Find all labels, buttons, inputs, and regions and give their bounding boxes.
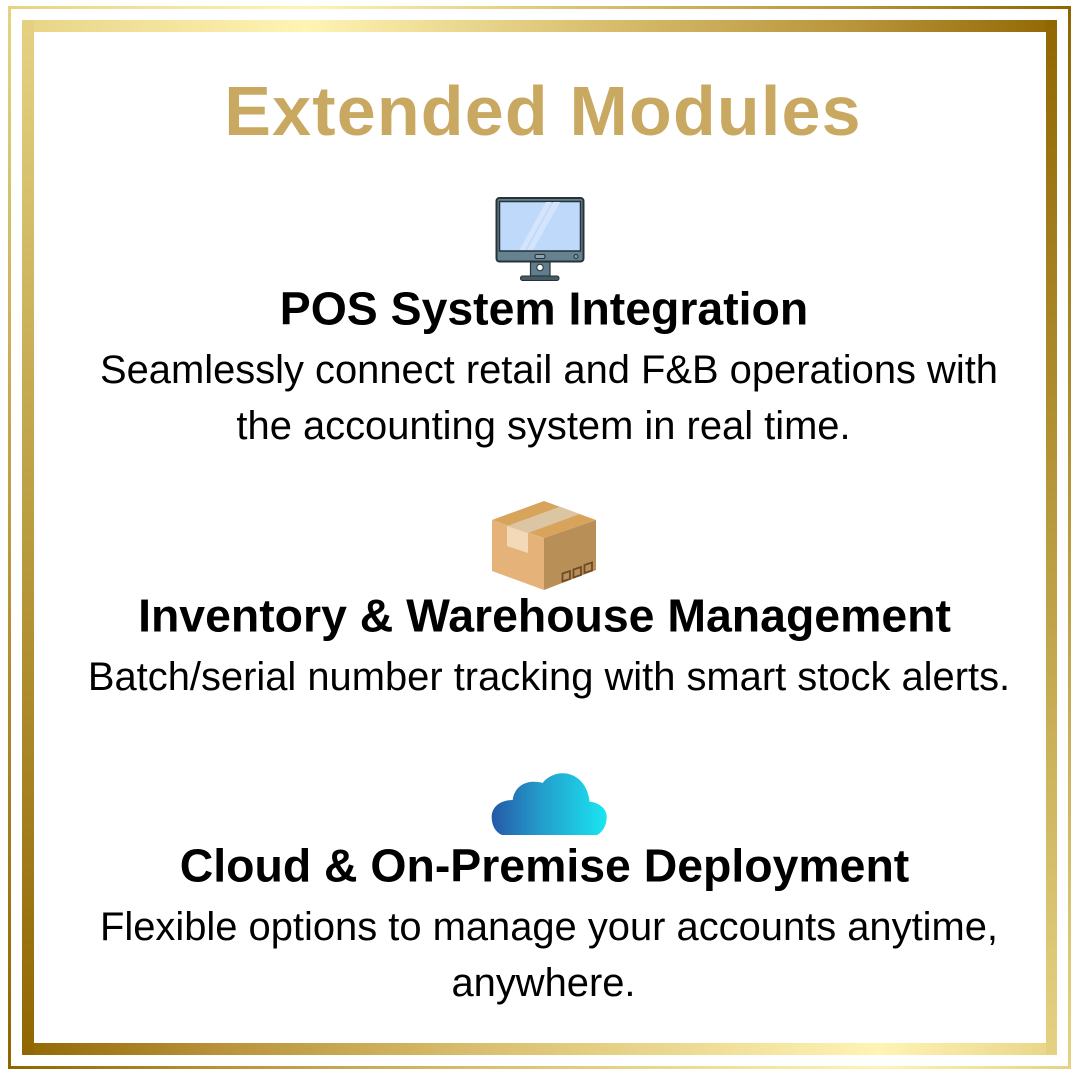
module: POS system integration <box>100 198 998 448</box>
heading: Inventory & Warehouse Management: Inventory & Warehouse Management <box>138 590 951 642</box>
heading: Cloud & On-Premise Deployment: Cloud & On-Premise Deployment <box>180 840 909 892</box>
icon: cardboard box <box>492 501 596 590</box>
heading: POS System Integration: POS System Integration <box>280 282 808 334</box>
description: deployment: Flexible options to manage your accounts anytime, <box>100 905 998 949</box>
icon: cloud <box>492 773 607 835</box>
description: deployment: anywhere. <box>451 961 636 1005</box>
description: POS: the accounting system in real time. <box>236 404 851 448</box>
description: inventory: Batch/serial number tracking with smart stock alerts. <box>88 655 1010 699</box>
description: POS: Seamlessly connect retail and F&B operations with <box>100 348 998 392</box>
module: cloud and on-premise deployment <box>100 773 998 1005</box>
module: inventory and warehouse management <box>88 501 1010 699</box>
icon: computer monitor <box>496 198 584 280</box>
title: Extended Modules <box>224 72 862 150</box>
